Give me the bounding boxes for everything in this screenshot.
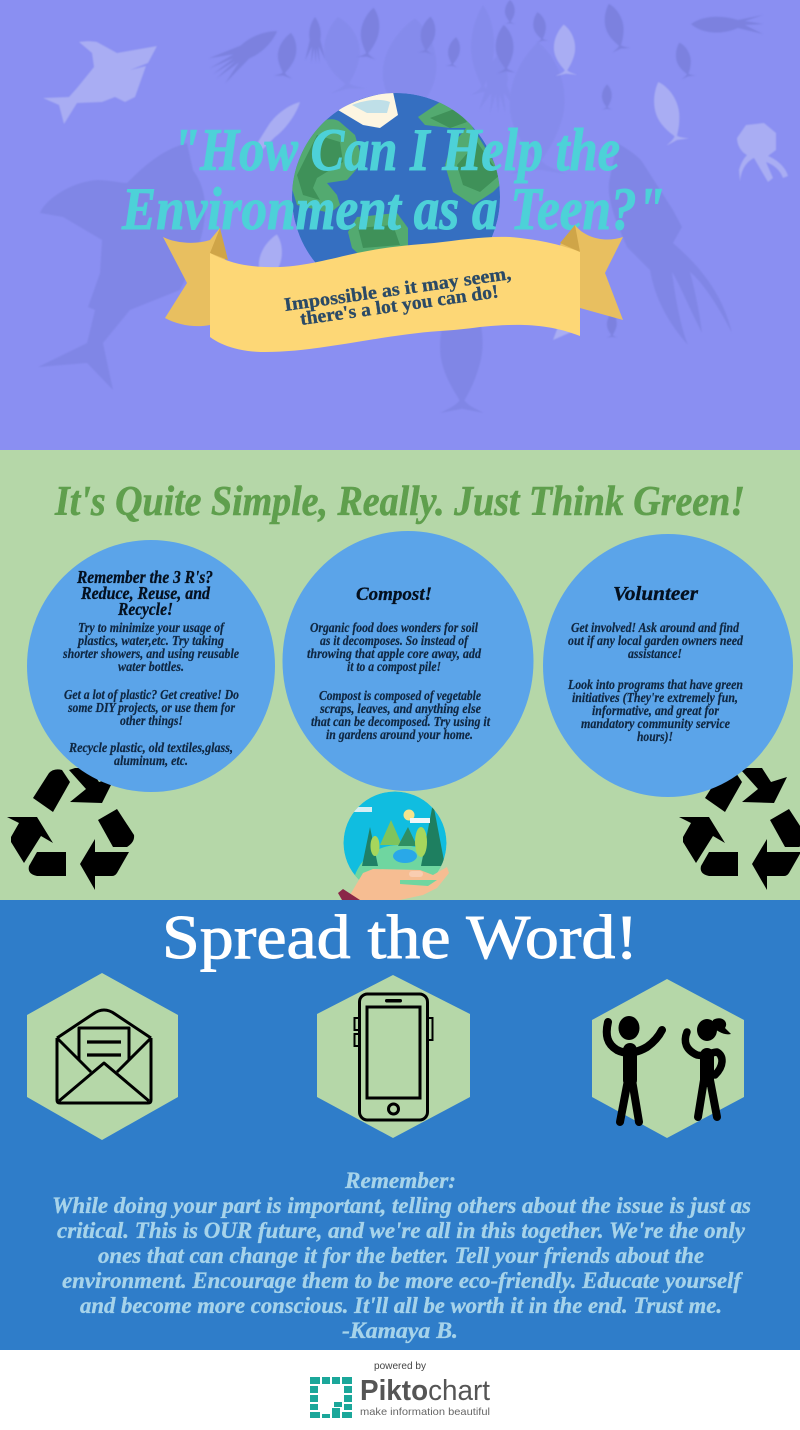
ice cap [338, 92, 398, 128]
body text: compost: throwing that apple core away, add [307, 646, 481, 661]
icon: recycle symbol left [7, 768, 134, 890]
panel: ocean header background [0, 0, 800, 450]
faint background fish silhouettes [320, 5, 566, 174]
body text: 3 Rs: aluminum, etc. [114, 753, 188, 768]
text block: remember message: critical. This is OUR future, and we're all in this together. We're the only [57, 1218, 746, 1243]
body text: volunteer: out if any local garden owners need [568, 633, 743, 648]
panel: volunteer circle [543, 534, 793, 797]
icon: smartphone in hexagon [317, 975, 470, 1138]
icon: earth globe [292, 93, 500, 262]
ribbon left fold [210, 228, 228, 260]
footer: powered by Piktochart [310, 1361, 490, 1418]
body text: compost: it to a compost pile! [347, 659, 441, 674]
logo mark [310, 1377, 352, 1418]
panel: think green background [0, 450, 800, 900]
southern continent [348, 213, 408, 253]
body text: compost: in gardens around your home. [326, 727, 473, 742]
tagline: make information beautiful [360, 1406, 490, 1418]
ice lake [352, 100, 390, 113]
heading: 3 Rs: Recycle! [117, 599, 173, 619]
heading: think green: It's Quite Simple, Really. Just Think Green! [54, 479, 745, 525]
title: Environment as a Teen?" [121, 176, 665, 242]
body text: volunteer [567, 620, 743, 744]
icon: hand holding globe [338, 792, 449, 900]
globe scene [344, 792, 446, 880]
body text: 3 Rs [62, 620, 239, 768]
body text: compost: Organic food does wonders for soil [310, 620, 478, 635]
icon: envelope in hexagon [27, 973, 178, 1140]
body text: compost [307, 620, 491, 742]
body text: 3 Rs: other things! [120, 713, 183, 728]
large dark sea creature silhouettes [38, 143, 732, 413]
thumb highlight [409, 871, 423, 877]
small dark sea creature silhouettes [205, 0, 763, 338]
body text: volunteer: initiatives (They're extremely fun, [572, 690, 738, 705]
title: "How Can I Help the [172, 117, 620, 183]
body text: compost: scraps, leaves, and anything else [319, 701, 481, 716]
icon: recycle symbol right [679, 768, 800, 890]
palm shadow [400, 880, 437, 886]
text block: remember message [52, 1168, 751, 1343]
text block: remember message: Remember: [344, 1168, 456, 1193]
ribbon subtitle: there's a lot you can do! [299, 281, 500, 330]
text block: remember message: environment. Encourage them to be more eco-friendly. Educate yourself [62, 1268, 743, 1293]
heading: 3 Rs: Reduce, Reuse, and [80, 583, 211, 603]
text block: remember message: and become more conscious. It'll all be worth it in the end. Trust me. [80, 1293, 722, 1318]
body text: 3 Rs: Recycle plastic, old textiles,glass, [68, 740, 233, 755]
panel: 3 Rs circle [27, 540, 275, 792]
panel: footer background [0, 1350, 800, 1430]
body text: compost: Compost is composed of vegetable [319, 688, 481, 703]
body text: 3 Rs: shorter showers, and using reusable [62, 646, 239, 661]
ribbon right fold [560, 225, 580, 252]
ribbon left tail [163, 228, 232, 326]
ribbon right tail [560, 225, 623, 320]
body text: volunteer: assistance! [628, 646, 682, 661]
body text: 3 Rs: water bottles. [118, 659, 184, 674]
heading: volunteer: Volunteer [613, 583, 698, 605]
heading: spread the word: Spread the Word! [162, 904, 638, 972]
text block: remember message: -Kamaya B. [342, 1318, 458, 1343]
body text: 3 Rs: Get a lot of plastic? Get creative! Do [64, 687, 239, 702]
ribbon subtitle: Impossible as it may seem, [283, 263, 513, 316]
body text: volunteer: informative, and great for [592, 703, 720, 718]
sleeve [338, 889, 360, 900]
body text: volunteer: mandatory community service [581, 716, 730, 731]
body text: volunteer: Get involved! Ask around and find [571, 620, 739, 635]
title [121, 117, 665, 242]
body text: 3 Rs: some DIY projects, or use them for [67, 700, 236, 715]
left continent [290, 119, 363, 213]
right continent [418, 102, 502, 205]
text block: remember message: ones that can change it for the better. Tell your friends about the [98, 1243, 704, 1268]
ribbon banner [163, 225, 623, 352]
panel: compost circle [282, 531, 534, 791]
body text: 3 Rs: plastics, water,etc. Try taking [77, 633, 224, 648]
panel: spread the word background [0, 900, 800, 1350]
body text: compost: as it decomposes. So instead of [320, 633, 469, 648]
light sea creature silhouettes [43, 24, 788, 340]
heading: 3 Rs: Remember the 3 R's? [76, 567, 213, 587]
body text: compost: that can be decomposed. Try using it [311, 714, 491, 729]
icon: two people in hexagon [592, 979, 744, 1138]
footer: powered by Piktochart: powered by [374, 1361, 426, 1372]
body text: volunteer: hours)! [637, 729, 673, 744]
heading: compost: Compost! [356, 584, 432, 605]
body text: 3 Rs: Try to minimize your usage of [78, 620, 225, 635]
text block: remember message: While doing your part is important, telling others about the issue is just as [52, 1193, 751, 1218]
hand [347, 867, 449, 900]
wordmark: Piktochart [360, 1375, 490, 1407]
ribbon main body [210, 237, 580, 352]
heading: 3 Rs [76, 567, 213, 619]
body text: volunteer: Look into programs that have green [567, 677, 743, 692]
